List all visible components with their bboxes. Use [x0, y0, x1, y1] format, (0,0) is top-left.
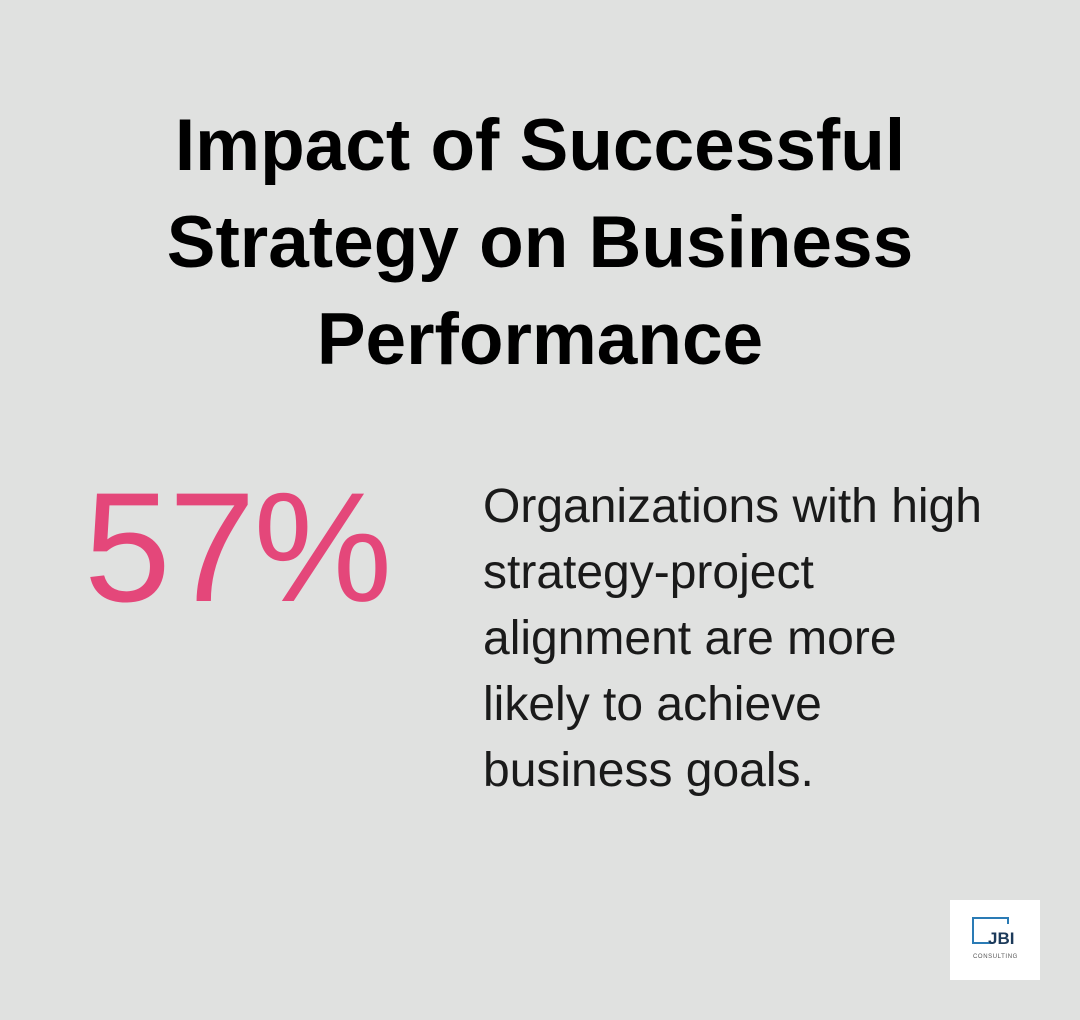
description text: business goals.: [483, 744, 814, 797]
title: [167, 105, 913, 380]
big stat: 57%: 57%: [84, 461, 390, 635]
title: Strategy on Business: [167, 202, 913, 283]
description text: likely to achieve: [483, 678, 822, 731]
title: Performance: [317, 299, 763, 380]
logo: JBI Consulting: [950, 900, 1040, 980]
description text: Organizations with high: [483, 480, 982, 533]
description text: alignment are more: [483, 612, 897, 665]
logo: JBI Consulting: JBI: [988, 929, 1014, 948]
title: Impact of Successful: [175, 105, 905, 186]
description text: [483, 480, 982, 797]
logo: JBI Consulting: CONSULTING: [973, 954, 1018, 960]
description text: strategy-project: [483, 546, 814, 599]
